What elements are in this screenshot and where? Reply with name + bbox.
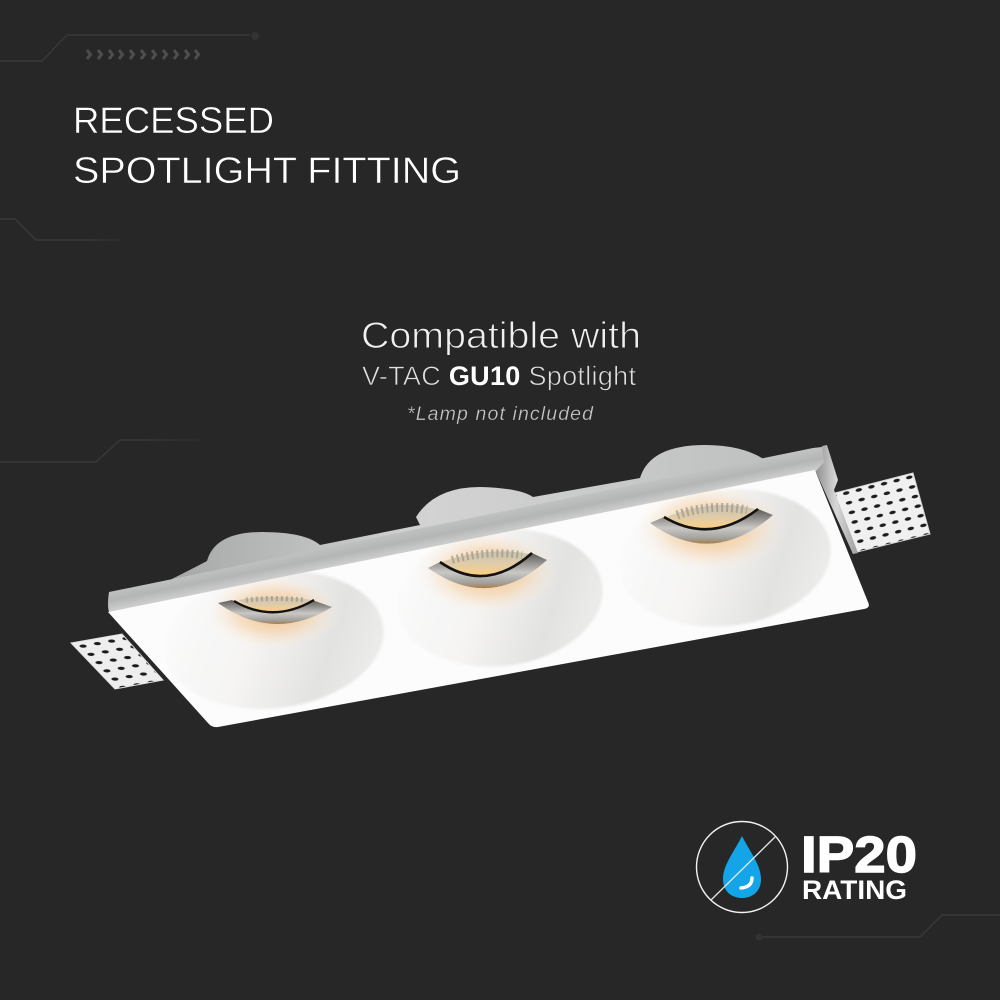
product: triple recessed fitting	[71, 445, 930, 740]
icon: crossed-out water drop	[696, 822, 788, 912]
rear domes	[150, 445, 770, 600]
right clip tab	[815, 445, 930, 554]
recess 2	[423, 530, 602, 666]
title	[73, 100, 461, 191]
compatibility text	[361, 315, 641, 425]
lamp 1	[218, 597, 332, 624]
title: RECESSED	[73, 100, 274, 141]
compatibility text: V-TAC GU10 Spotlight	[362, 361, 636, 391]
top edge band	[108, 447, 824, 612]
compatibility text: Compatible with	[361, 315, 641, 356]
IP20 label: IP20	[801, 826, 917, 883]
title: SPOTLIGHT FITTING	[73, 150, 461, 191]
left clip tab	[71, 634, 163, 689]
lamp 2	[428, 551, 547, 588]
rating label: RATING	[802, 875, 907, 905]
circuit line: middle left lower	[0, 440, 210, 462]
IP20 badge	[696, 822, 917, 912]
lamp 3	[650, 505, 773, 544]
chevron row	[87, 50, 198, 59]
front face	[108, 470, 869, 728]
circuit line: top left	[0, 32, 259, 61]
recess 1	[208, 572, 384, 709]
compatibility text: *Lamp not included	[407, 403, 594, 425]
circuit line: bottom right	[756, 915, 1000, 940]
recess 3	[643, 489, 830, 626]
circuit line: middle left upper	[0, 219, 128, 240]
